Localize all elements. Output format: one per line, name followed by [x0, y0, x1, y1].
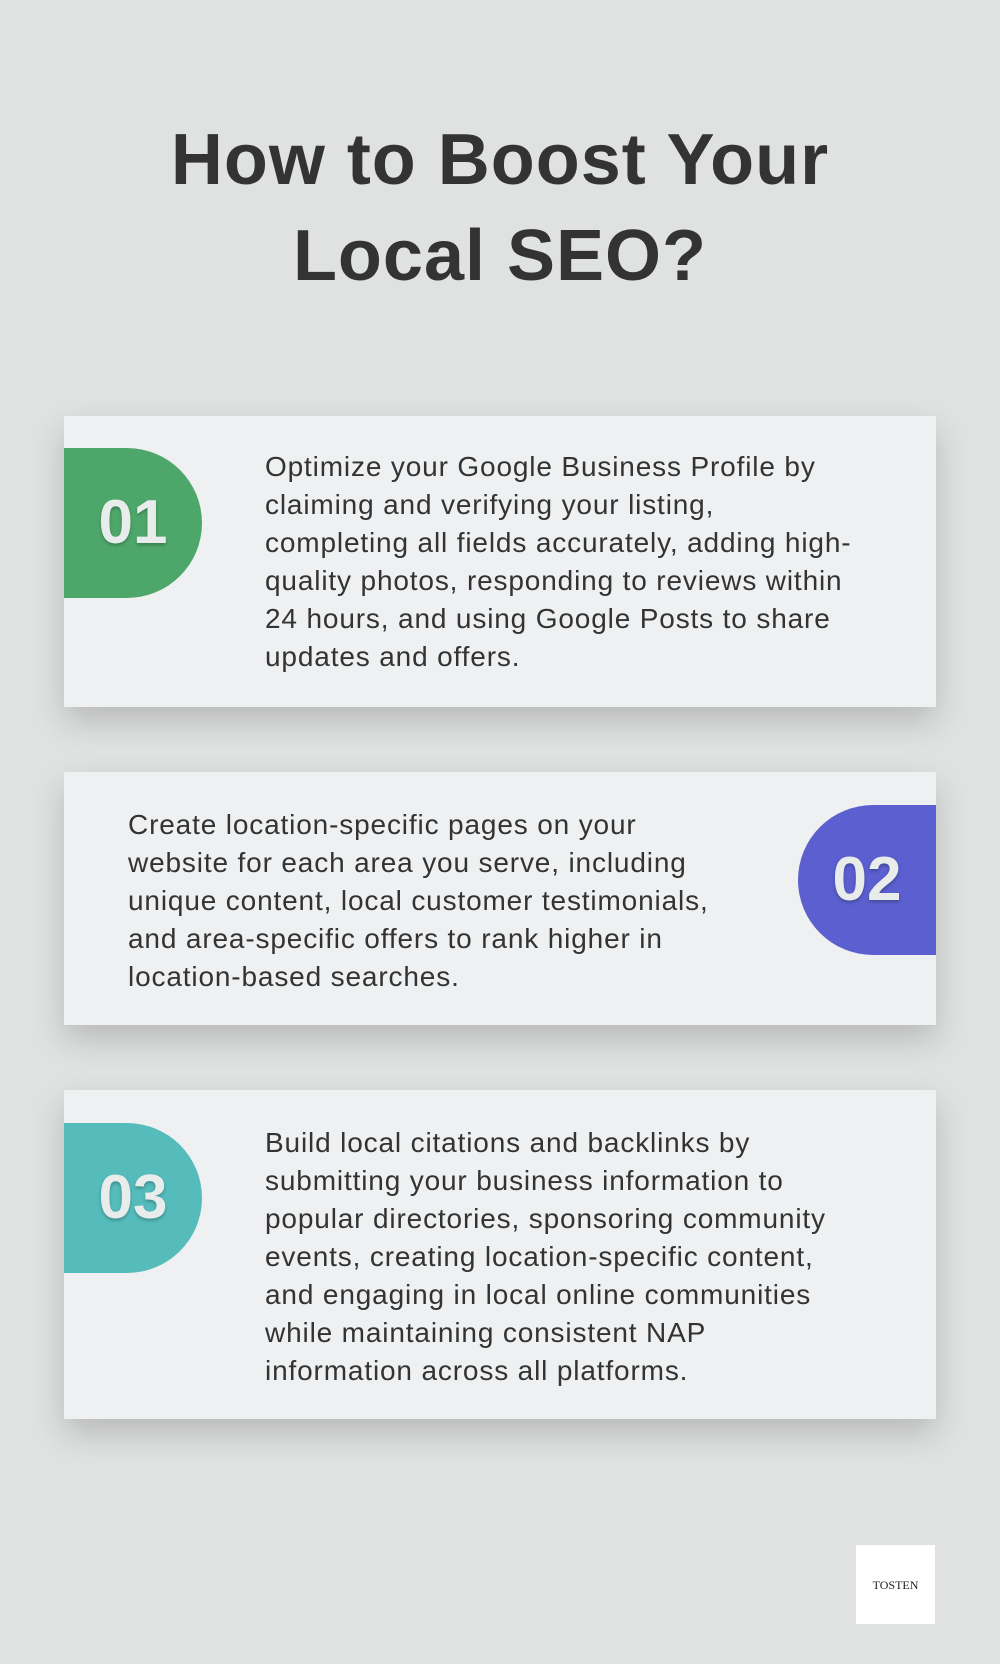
logo: TOSTEN: [873, 1578, 918, 1592]
text: step 3: submitting your business information to: [265, 1165, 784, 1196]
text: step 3: popular directories, sponsoring community: [265, 1203, 826, 1234]
text: step 2: [128, 809, 709, 992]
text: step 3: while maintaining consistent NAP: [265, 1317, 706, 1348]
badge 01: [64, 448, 202, 598]
badge 03: [64, 1123, 202, 1273]
text: step 3: information across all platforms.: [265, 1355, 688, 1386]
panel: step 1: [64, 416, 936, 707]
text: step 2: unique content, local customer testimonials,: [128, 885, 709, 916]
text: step 2: website for each area you serve, including: [128, 847, 687, 878]
title: Local SEO?: [293, 216, 707, 296]
panel: step 2: [64, 772, 936, 1025]
badge 02: 02: [833, 845, 901, 914]
text: step 2: and area-specific offers to rank higher in: [128, 923, 663, 954]
text: step 3: and engaging in local online communities: [265, 1279, 811, 1310]
title: [171, 120, 829, 296]
text: step 1: claiming and verifying your listing,: [265, 489, 714, 520]
text: step 3: Build local citations and backlinks by: [265, 1127, 750, 1158]
badge 01: 01: [99, 488, 167, 557]
badge 03: 03: [99, 1163, 167, 1232]
text: step 1: Optimize your Google Business Profile by: [265, 451, 816, 482]
badge 02: [798, 805, 936, 955]
text: step 3: [265, 1127, 826, 1386]
text: step 2: location-based searches.: [128, 961, 460, 992]
panel: step 3: [64, 1090, 936, 1419]
logo: [856, 1545, 935, 1624]
text: step 1: updates and offers.: [265, 641, 520, 672]
text: step 1: completing all fields accurately, adding high-: [265, 527, 851, 558]
text: step 3: events, creating location-specific content,: [265, 1241, 814, 1272]
text: step 2: Create location-specific pages on your: [128, 809, 637, 840]
text: step 1: [265, 451, 851, 672]
text: step 1: 24 hours, and using Google Posts to share: [265, 603, 831, 634]
text: step 1: quality photos, responding to reviews within: [265, 565, 842, 596]
title: How to Boost Your: [171, 120, 829, 200]
